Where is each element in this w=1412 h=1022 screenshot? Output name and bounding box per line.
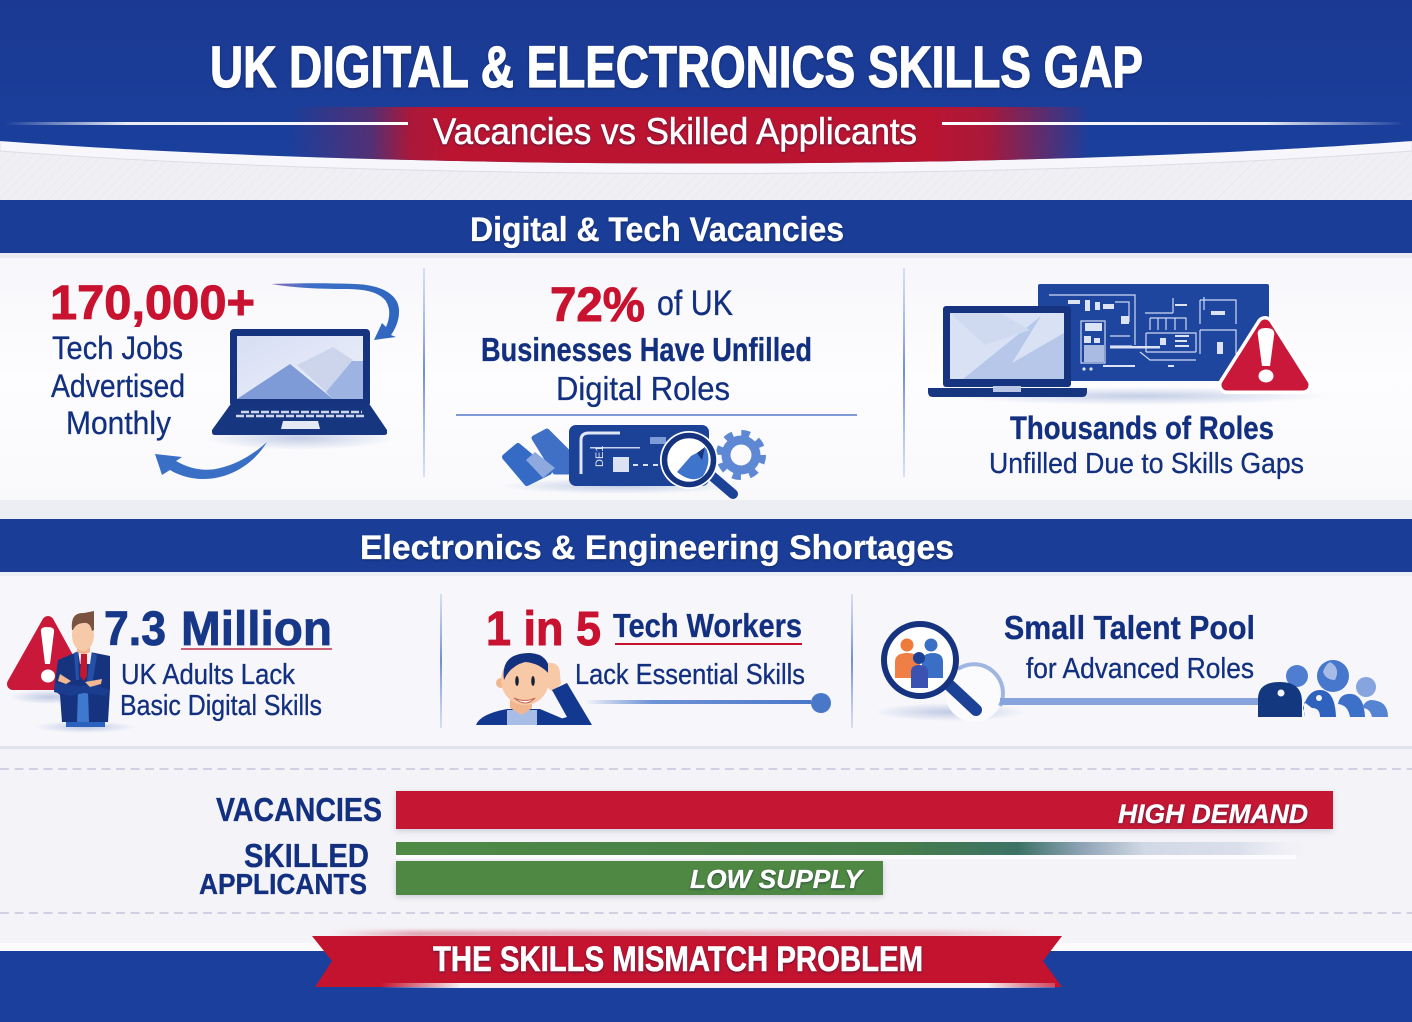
track highlight	[396, 855, 1296, 859]
icon: digital roles cluster: DE1	[594, 446, 606, 467]
ribbon	[312, 936, 1062, 987]
icon: magnifying glass over people	[875, 624, 1025, 722]
icon: digital roles cluster	[500, 425, 763, 494]
panel: demand versus supply chart	[0, 769, 1412, 913]
text: lack essential skills: Lack Essential Skills	[575, 659, 805, 691]
connector line	[1000, 698, 1262, 705]
stat: 1 in 5: 1 in 5	[486, 603, 601, 656]
section heading: Electronics & Engineering Shortages	[360, 529, 954, 567]
section heading: Digital & Tech Vacancies	[470, 211, 844, 249]
panel: electronics and engineering shortages	[0, 519, 1412, 749]
businessman	[54, 611, 110, 727]
title: UK DIGITAL & ELECTRONICS SKILLS GAP	[210, 35, 1143, 100]
rule	[456, 414, 857, 416]
ribbon glow	[330, 931, 1045, 937]
text: tech jobs: Tech Jobs	[52, 330, 183, 366]
bar: vacancies	[396, 791, 1333, 829]
text: tech workers: Tech Workers	[613, 607, 802, 644]
laptop	[928, 306, 1087, 397]
bar: gap track	[396, 842, 1310, 855]
text: advertised: Advertised	[51, 368, 185, 404]
subtitle ribbon	[290, 107, 1090, 167]
text: thousands of roles: Thousands of Roles	[1010, 410, 1274, 446]
warning triangle	[1227, 325, 1303, 385]
ribbon text: THE SKILLS MISMATCH PROBLEM	[433, 940, 923, 979]
icon: talent pool people	[1258, 660, 1388, 717]
bar: skilled applicants	[396, 861, 883, 895]
slider line	[585, 700, 811, 704]
panel: header banner	[0, 0, 1412, 200]
text: for advanced roles: for Advanced Roles	[1026, 653, 1254, 685]
section heading bar	[0, 519, 1412, 572]
arrow: top curved	[271, 283, 399, 340]
blueprint board	[1038, 284, 1269, 381]
label: applicants: APPLICANTS	[199, 869, 367, 901]
section heading bar	[0, 200, 1412, 253]
header rule right	[942, 122, 1405, 125]
text: small talent pool: Small Talent Pool	[1004, 609, 1255, 646]
bar label: low supply: LOW SUPPLY	[690, 864, 865, 894]
text: businesses: Businesses Have Unfilled	[481, 331, 812, 368]
ribbon highlight	[380, 983, 1055, 988]
stat: 170,000+: 170,000+	[50, 277, 255, 330]
divider	[903, 268, 905, 477]
slider dot	[811, 693, 831, 713]
icon: warning with businessman	[10, 611, 135, 733]
header rule left	[5, 122, 408, 125]
underline	[615, 643, 802, 645]
panel: digital and tech vacancies	[0, 200, 1412, 519]
divider	[423, 268, 425, 477]
stat: 72%: 72%	[550, 279, 645, 332]
bar label: high demand: HIGH DEMAND	[1118, 799, 1308, 829]
icon: blueprint with laptop and warning	[928, 284, 1330, 405]
text: unfilled due to skills gaps: Unfilled Due to Skills Gaps	[989, 448, 1304, 480]
subtitle: Vacancies vs Skilled Applicants	[433, 111, 917, 152]
text: of UK: of UK	[657, 284, 733, 323]
panel: footer banner	[0, 931, 1412, 1022]
stat: million: Million	[181, 603, 332, 656]
arrow: bottom curved	[155, 442, 267, 479]
icon: confused worker	[476, 653, 592, 725]
divider	[440, 594, 442, 728]
stat: 7.3: 7.3	[104, 603, 166, 656]
text: basic digital skills: Basic Digital Skills	[120, 690, 322, 722]
text: uk adults lack: UK Adults Lack	[121, 659, 295, 691]
icon: laptop	[205, 329, 395, 450]
icon: gear	[719, 433, 763, 477]
text: digital roles: Digital Roles	[556, 370, 730, 407]
text: monthly: Monthly	[66, 405, 171, 441]
divider	[851, 594, 853, 728]
label: skilled: SKILLED	[244, 837, 369, 874]
label: vacancies: VACANCIES	[216, 791, 382, 828]
underline	[181, 648, 332, 650]
